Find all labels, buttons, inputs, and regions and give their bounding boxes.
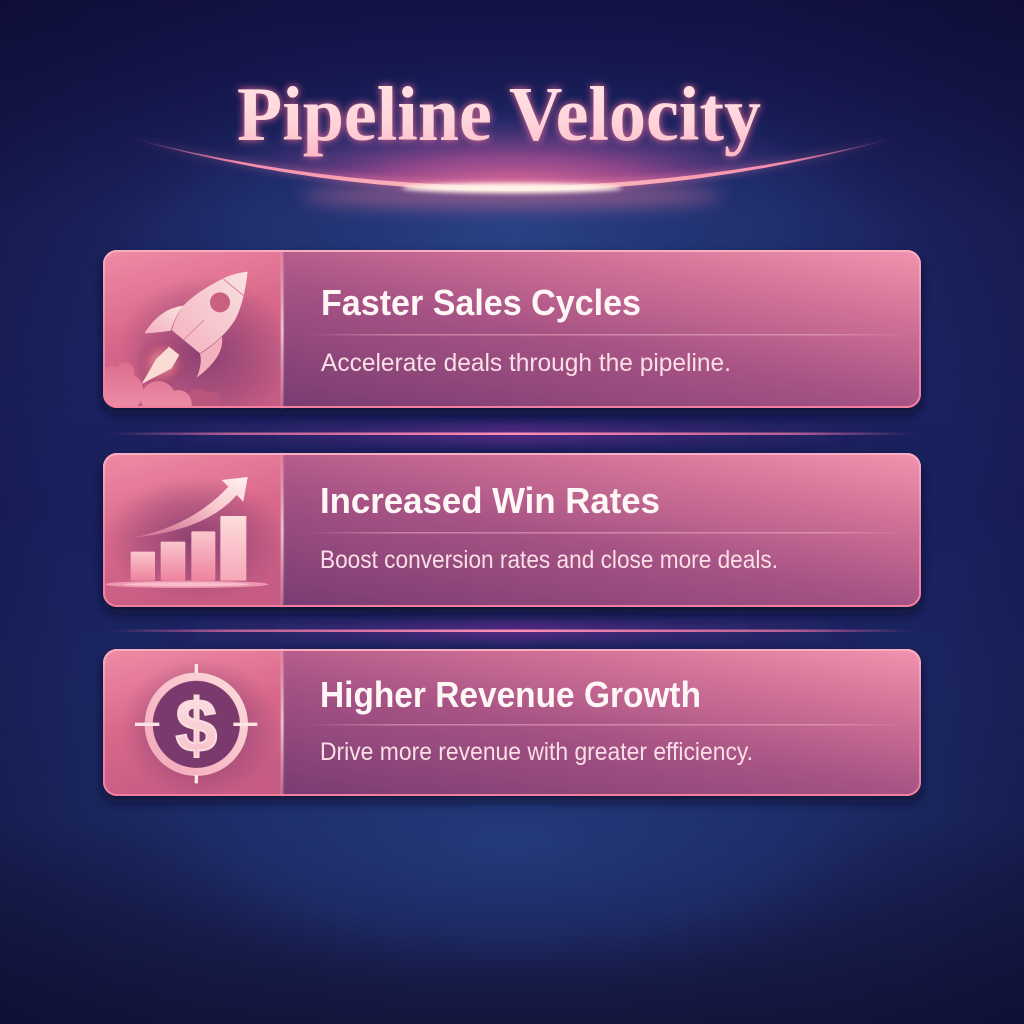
description: Drive more revenue with greater efficiency. xyxy=(320,738,753,766)
panel: faster sales cycles xyxy=(98,250,921,428)
card border xyxy=(104,251,920,407)
heading: Higher Revenue Growth xyxy=(320,674,701,715)
icon panel: chart background xyxy=(103,453,287,607)
icon: rocket xyxy=(105,272,248,408)
panel: increased win rates xyxy=(103,453,921,613)
panel: higher revenue growth xyxy=(103,649,921,802)
icon: dollar target xyxy=(135,664,257,783)
title: Pipeline Velocity xyxy=(237,71,761,157)
card border xyxy=(104,454,920,606)
heading: Faster Sales Cycles xyxy=(321,282,641,323)
title glow arc xyxy=(134,118,890,220)
title: Pipeline Velocity xyxy=(237,71,761,157)
heading: Increased Win Rates xyxy=(320,480,660,521)
icon panel: rocket background xyxy=(103,250,282,408)
separator glow 2 xyxy=(150,621,874,641)
rule xyxy=(305,724,910,726)
description: Boost conversion rates and close more deals. xyxy=(320,546,778,574)
separator line 1 xyxy=(110,432,914,435)
divider xyxy=(281,250,284,408)
separator line 2 xyxy=(110,630,914,632)
card border xyxy=(104,650,920,795)
icon: growth bars and arrow xyxy=(105,477,268,588)
separator glow 1 xyxy=(150,424,874,444)
divider xyxy=(281,453,284,607)
rule xyxy=(305,532,910,534)
icon panel: target background xyxy=(103,649,282,798)
rule xyxy=(305,334,910,336)
divider xyxy=(281,649,284,796)
description: Accelerate deals through the pipeline. xyxy=(321,349,731,377)
icon: dollar target: $ xyxy=(175,683,217,767)
